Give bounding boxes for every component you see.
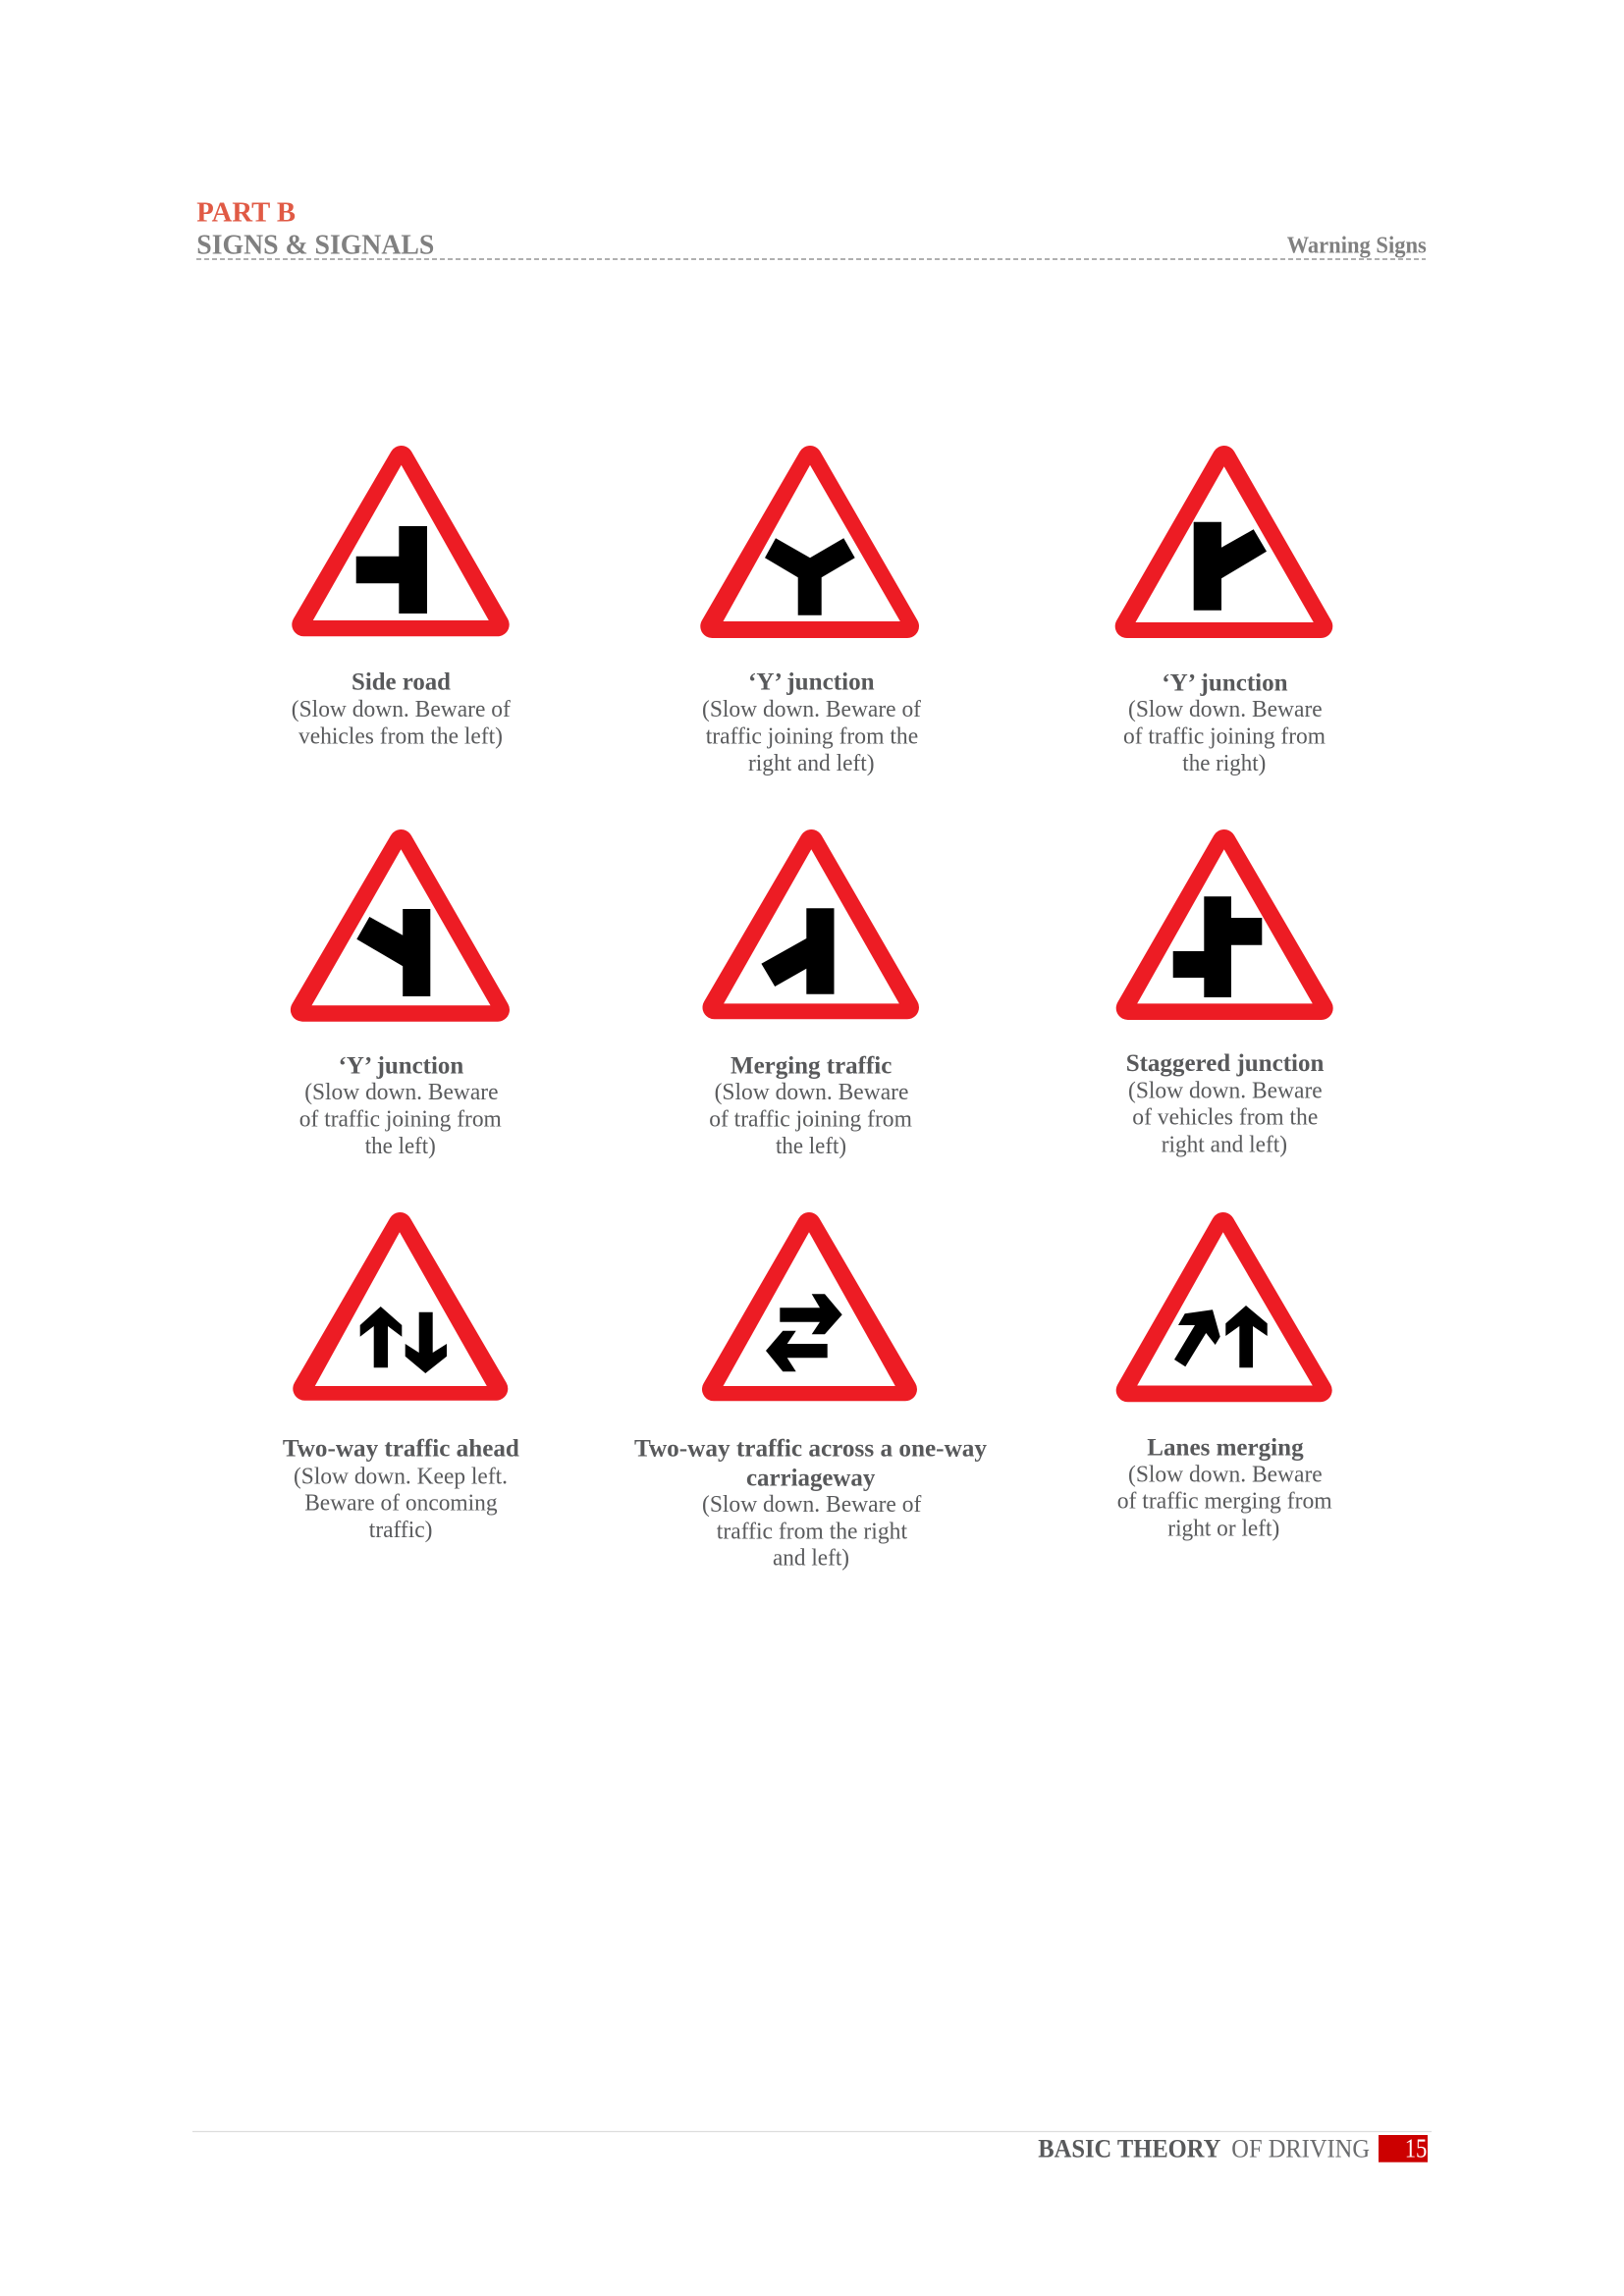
page number: 15: [1405, 2133, 1427, 2163]
caption: Y junction left: ‘Y’ junction: [339, 1052, 463, 1079]
caption: Y junction both sides: right and left): [748, 751, 874, 776]
icon: lanes merging sign: [1128, 1224, 1321, 1390]
caption: two-way traffic across one-way: [634, 1435, 987, 1571]
icon: Y junction left sign: [302, 841, 498, 1010]
caption: Y junction right: of traffic joining from: [1123, 723, 1326, 749]
part label: PART B: [196, 197, 296, 229]
caption: side road: [292, 669, 511, 749]
icon: two-way traffic ahead sign: [304, 1224, 496, 1389]
caption: merging traffic: the left): [776, 1134, 846, 1159]
caption: lanes merging: (Slow down. Beware: [1128, 1462, 1323, 1487]
caption: merging traffic: [709, 1052, 912, 1159]
caption: side road: (Slow down. Beware of: [292, 697, 511, 722]
caption: Y junction right: the right): [1182, 751, 1266, 776]
caption: lanes merging: Lanes merging: [1147, 1434, 1304, 1461]
caption: staggered junction: of vehicles from the: [1132, 1105, 1318, 1131]
caption: two-way traffic across one-way: (Slow down. Beware of: [702, 1492, 921, 1518]
footer title: OF DRIVING: [1231, 2134, 1370, 2163]
caption: merging traffic: (Slow down. Beware: [715, 1080, 908, 1105]
icon: two-way traffic across sign: [714, 1224, 905, 1389]
caption: Y junction both sides: [702, 669, 921, 776]
sign panel: merging traffic: [709, 841, 912, 1159]
caption: Y junction both sides: ‘Y’ junction: [748, 669, 875, 696]
caption: merging traffic: Merging traffic: [731, 1052, 892, 1079]
sign panel: two-way traffic ahead: [283, 1224, 519, 1543]
caption: two-way traffic across one-way: carriageway: [746, 1465, 876, 1491]
sign panel: lanes merging: [1117, 1224, 1332, 1541]
caption: two-way traffic across one-way: Two-way traffic across a one-way: [634, 1435, 987, 1462]
caption: Y junction left: [299, 1052, 502, 1159]
caption: lanes merging: [1117, 1434, 1332, 1541]
caption: Y junction left: of traffic joining from: [299, 1106, 502, 1132]
caption: merging traffic: of traffic joining from: [709, 1106, 912, 1132]
caption: two-way traffic ahead: Beware of oncoming: [304, 1490, 498, 1516]
caption: staggered junction: (Slow down. Beware: [1128, 1078, 1323, 1103]
caption: two-way traffic across one-way: traffic from the right: [717, 1519, 907, 1544]
caption: Y junction right: (Slow down. Beware: [1128, 697, 1323, 722]
section title: SIGNS & SIGNALS: [196, 229, 434, 260]
icon: side road sign: [303, 457, 498, 624]
caption: Y junction left: the left): [365, 1134, 436, 1159]
caption: lanes merging: right or left): [1167, 1516, 1279, 1541]
icon: Y junction right sign: [1127, 457, 1321, 626]
caption: staggered junction: Staggered junction: [1126, 1050, 1324, 1077]
page number: [1379, 2133, 1428, 2163]
sign panel: Y junction left: [299, 841, 502, 1159]
subsection title: Warning Signs: [1287, 233, 1427, 258]
footer title: BASIC THEORY: [1038, 2134, 1221, 2163]
footer: [192, 2132, 1432, 2163]
sign panel: two-way traffic across one-way: [634, 1224, 987, 1571]
caption: side road: Side road: [352, 669, 451, 696]
icon: Y junction sign: [712, 457, 907, 626]
sign panel: staggered junction: [1126, 841, 1324, 1157]
icon: staggered junction sign: [1128, 841, 1322, 1008]
caption: Y junction right: [1123, 669, 1326, 776]
sign panel: Y junction right: [1123, 457, 1326, 776]
caption: lanes merging: of traffic merging from: [1117, 1489, 1332, 1515]
caption: two-way traffic across one-way: and left): [773, 1545, 849, 1571]
caption: two-way traffic ahead: (Slow down. Keep left.: [294, 1465, 508, 1490]
sign panel: Y junction both sides: [702, 457, 921, 776]
caption: staggered junction: [1126, 1050, 1324, 1157]
icon: merging traffic sign: [715, 841, 907, 1007]
caption: Y junction both sides: traffic joining from the: [706, 723, 918, 749]
caption: side road: vehicles from the left): [298, 723, 503, 749]
caption: two-way traffic ahead: [283, 1435, 519, 1543]
caption: Y junction both sides: (Slow down. Beware of: [702, 697, 921, 722]
footer title: [1038, 2134, 1370, 2163]
caption: two-way traffic ahead: traffic): [369, 1518, 432, 1543]
caption: Y junction left: (Slow down. Beware: [304, 1080, 499, 1105]
header: [196, 197, 1427, 260]
caption: staggered junction: right and left): [1162, 1132, 1287, 1157]
sign panel: side road: [292, 457, 511, 749]
caption: Y junction right: ‘Y’ junction: [1162, 669, 1288, 696]
caption: two-way traffic ahead: Two-way traffic ahead: [283, 1435, 519, 1462]
